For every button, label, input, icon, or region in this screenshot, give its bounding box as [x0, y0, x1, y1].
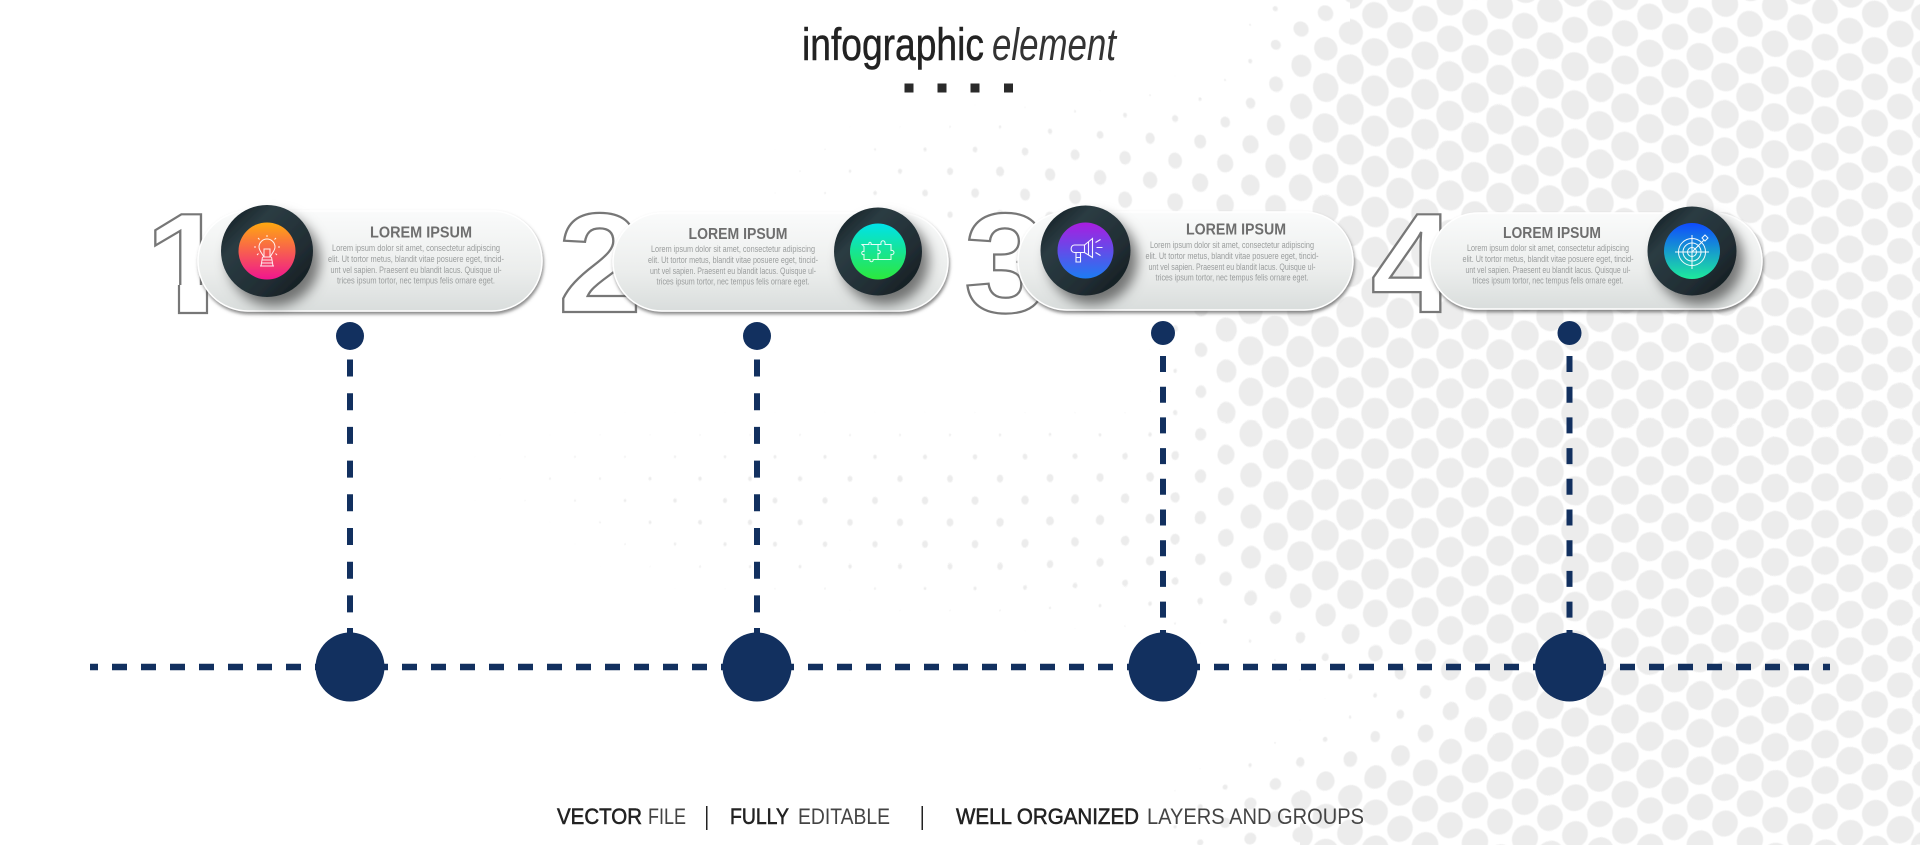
footer text: WELL ORGANIZED	[956, 804, 1139, 829]
text 2: unt vel sapien. Praesent eu blandit lacus. Quisque ul-	[650, 266, 816, 276]
title	[802, 19, 1118, 70]
horizontal dashed timeline	[90, 664, 1830, 670]
text 4	[1462, 243, 1634, 286]
pill 4	[1430, 213, 1762, 309]
connector 3	[1128, 321, 1198, 702]
number 1	[154, 213, 208, 314]
text 1: Lorem ipsum dolor sit amet, consectetur adipiscing	[332, 243, 500, 253]
text 2: trices ipsum tortor, nec tempus felis ornare eget.	[656, 276, 810, 286]
number 2: 2	[558, 184, 642, 343]
text 2: Lorem ipsum dolor sit amet, consectetur adipiscing	[651, 244, 815, 254]
number 4: 4	[1371, 184, 1455, 343]
number 3: 3	[964, 184, 1048, 343]
footer text: EDITABLE	[798, 804, 890, 829]
connector 1	[316, 322, 384, 702]
footer text	[557, 804, 1364, 830]
text 4: trices ipsum tortor, nec tempus felis ornare eget.	[1472, 276, 1624, 286]
icon button: light bulb	[221, 205, 313, 297]
pill 2	[613, 213, 948, 311]
panel: step 2	[558, 184, 948, 343]
panel: step 4	[1371, 184, 1762, 343]
panel: step 1	[154, 205, 546, 317]
title: element	[992, 19, 1118, 70]
panel: step 3	[964, 184, 1353, 343]
footer text: VECTOR	[557, 804, 642, 829]
text 1: elit. Ut tortor metus, blandit vitae posuere eget, tincid-	[328, 254, 504, 264]
text 3: Lorem ipsum dolor sit amet, consectetur adipiscing	[1150, 240, 1314, 250]
number 1: 1	[145, 184, 229, 343]
pill 3	[1018, 212, 1353, 310]
text 4: elit. Ut tortor metus, blandit vitae posuere eget, tincid-	[1462, 254, 1634, 264]
icon button: target	[1648, 206, 1736, 296]
icon button: puzzle	[834, 208, 922, 296]
text 3: trices ipsum tortor, nec tempus felis ornare eget.	[1156, 272, 1308, 282]
heading 4: LOREM IPSUM	[1503, 225, 1601, 242]
text 1: unt vel sapien. Praesent eu blandit lacus. Quisque ul-	[330, 265, 502, 275]
text 4: Lorem ipsum dolor sit amet, consectetur adipiscing	[1467, 243, 1629, 253]
heading 3: LOREM IPSUM	[1186, 222, 1286, 238]
text 1	[328, 243, 504, 286]
text 2: elit. Ut tortor metus, blandit vitae posuere eget, tincid-	[648, 255, 818, 265]
text 2	[648, 244, 818, 286]
text 3: unt vel sapien. Praesent eu blandit lacus. Quisque ul-	[1148, 262, 1316, 272]
footer text: FILE	[648, 804, 686, 829]
icon button: megaphone	[1040, 206, 1130, 296]
connector 4	[1535, 321, 1604, 702]
title dots	[904, 84, 1013, 92]
footer text: LAYERS AND GROUPS	[1147, 804, 1364, 829]
title: infographic	[802, 19, 984, 70]
text 3: elit. Ut tortor metus, blandit vitae posuere eget, tincid-	[1146, 251, 1318, 261]
background: halftone dot field	[524, 0, 1920, 845]
pill 1	[198, 211, 542, 311]
text 3	[1146, 240, 1318, 282]
heading 1: LOREM IPSUM	[370, 224, 472, 242]
heading 2: LOREM IPSUM	[688, 226, 788, 243]
footer text: FULLY	[730, 804, 789, 829]
connector 2	[722, 322, 792, 702]
text 1: trices ipsum tortor, nec tempus felis ornare eget.	[337, 276, 495, 286]
text 4: unt vel sapien. Praesent eu blandit lacus. Quisque ul-	[1466, 265, 1630, 275]
